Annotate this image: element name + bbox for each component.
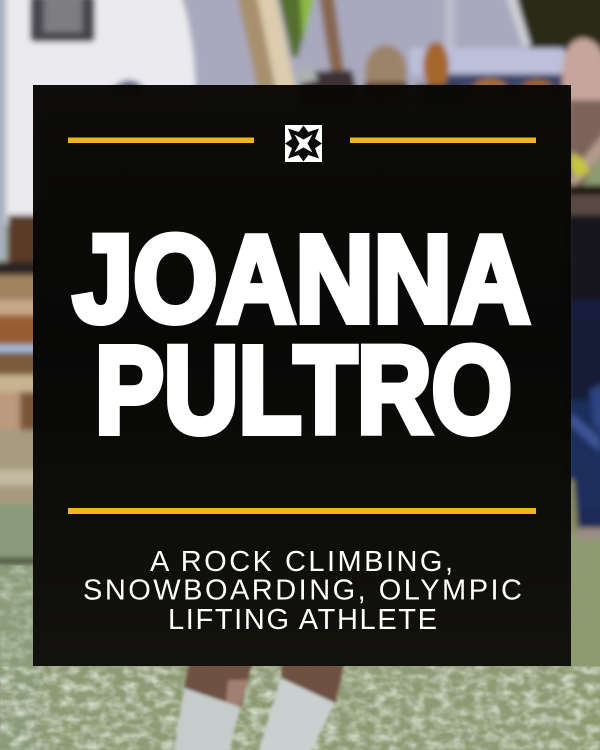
- subtitle: SNOWBOARDING, OLYMPIC: [83, 574, 522, 606]
- top rule right: [350, 138, 536, 143]
- title: [73, 212, 530, 460]
- grass texture: [0, 545, 600, 750]
- subtitle: LIFTING ATHLETE: [168, 604, 437, 636]
- icon: star emblem: [285, 125, 322, 162]
- title: JOANNA: [73, 212, 530, 348]
- dark panel: [33, 85, 571, 666]
- left side scene: [8, 215, 42, 265]
- subtitle: A ROCK CLIMBING,: [150, 546, 453, 578]
- subtitle: [83, 546, 522, 636]
- bottom rule: [68, 508, 536, 514]
- top rule left: [68, 138, 254, 143]
- legs and socks: [172, 664, 344, 750]
- right person: [562, 38, 600, 110]
- title: PULTRO: [95, 322, 512, 460]
